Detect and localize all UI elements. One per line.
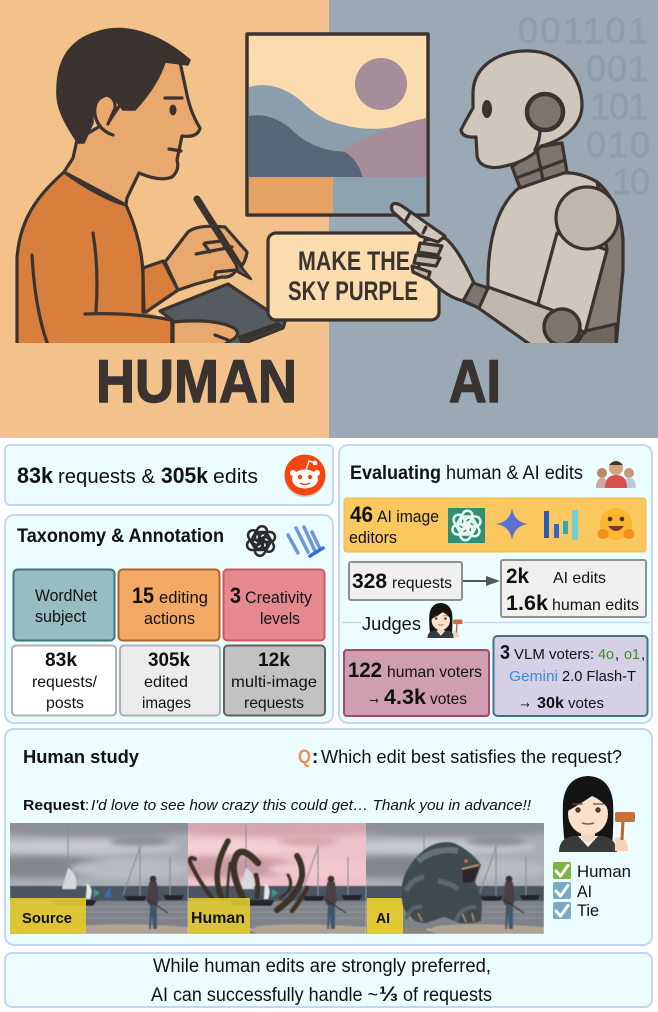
box: AI image editors: AI image [377, 507, 439, 526]
icon: hugging face [598, 508, 634, 540]
photo: source [10, 823, 188, 934]
conclusion text: of requests [403, 985, 492, 1006]
panel: human study [0, 729, 652, 945]
box: AI and human edits: 2k [506, 565, 529, 588]
box: AI image editors [344, 498, 646, 552]
box: multi-image requests count: multi-image [231, 674, 317, 691]
robot figure [392, 51, 623, 348]
arrow: requests to edits [463, 576, 500, 586]
heading: Evaluating [350, 463, 441, 484]
conclusion text: While human edits are strongly preferred, [153, 956, 491, 977]
panel: taxonomy and annotation [5, 515, 333, 723]
photo: source: Source [22, 910, 72, 927]
conclusion text [151, 956, 492, 1006]
box: VLM voters [494, 636, 648, 716]
summary text [17, 463, 258, 488]
icon: reddit [284, 454, 326, 498]
icon: judge [559, 776, 635, 852]
box: editing actions: editing [159, 588, 208, 607]
binary digits background [518, 10, 650, 202]
request text: Request [23, 797, 85, 814]
box: requests count: 83k [45, 650, 77, 671]
panel: conclusion [5, 953, 652, 1007]
box: requests count [12, 646, 116, 716]
heading: Taxonomy & Annotation [17, 526, 224, 547]
box: edited images count: edited [144, 674, 188, 691]
heading: Human study [23, 747, 139, 767]
legend: vote options [553, 862, 631, 920]
box: human voters [344, 650, 489, 716]
summary text: 305k [161, 463, 209, 488]
box: edited images count: 305k [148, 650, 190, 671]
box: VLM voters: votes [568, 695, 604, 712]
box: human voters: → [367, 687, 381, 709]
box: editing actions [118, 570, 220, 640]
heading [350, 463, 583, 484]
box: edited images count: images [142, 695, 191, 712]
photo: AI edit with monster [366, 823, 544, 934]
box: VLM voters: o1 [624, 646, 640, 663]
icon: group of people [596, 461, 636, 488]
question: : [312, 747, 318, 768]
question: Which edit best satisfies the request? [321, 747, 622, 767]
icon: small judge [427, 603, 462, 638]
binary digits background: 001101 [518, 10, 648, 51]
icon: bars logo [544, 510, 578, 540]
binary digits background: 10 [612, 161, 650, 202]
box: AI image editors: 46 [350, 502, 373, 527]
box: VLM voters: , [615, 646, 619, 663]
box: wordnet subject: WordNet [35, 586, 97, 605]
callout: make the sky purple [268, 233, 439, 320]
conclusion text: AI can successfully handle ~ [151, 985, 378, 1006]
photo: human edit with tentacles: Human [191, 910, 245, 927]
box: wordnet subject: subject [35, 607, 86, 626]
photo: human edit with tentacles [187, 823, 366, 934]
painting being edited [247, 34, 428, 215]
callout: make the sky purple: SKY PURPLE [288, 276, 418, 306]
request text: : [85, 797, 89, 814]
heading: human & AI edits [446, 463, 583, 484]
box: editing actions: 15 [132, 583, 154, 608]
summary text: edits [213, 466, 258, 488]
box: wordnet subject [14, 570, 114, 640]
photo: AI edit with monster: AI [376, 910, 390, 927]
binary digits background: 101 [590, 86, 648, 127]
box: human voters: 122 [348, 659, 382, 682]
conclusion text: ⅓ [379, 983, 398, 1006]
option: tie: Tie [577, 901, 599, 920]
box: creativity levels: 3 [230, 583, 241, 608]
box: human voters: votes [430, 691, 467, 708]
callout: make the sky purple: MAKE THE [298, 246, 410, 276]
box: AI image editors: editors [349, 528, 397, 547]
option: AI: AI [577, 882, 592, 901]
box: multi-image requests count: 12k [258, 650, 290, 671]
panel: dataset summary [5, 445, 333, 505]
box: human voters: human voters [387, 664, 482, 681]
box: 328 requests: requests [392, 575, 452, 592]
box: VLM voters: 30k [537, 695, 564, 712]
box: VLM voters: 2.0 Flash-T [562, 668, 636, 685]
box: VLM voters: 4o [598, 646, 614, 663]
box: VLM voters: Gemini [509, 668, 558, 685]
human figure [17, 28, 285, 346]
box: creativity levels [224, 570, 324, 640]
box: multi-image requests count [224, 646, 325, 716]
hero illustration: human versus AI [0, 0, 658, 438]
box: edited images count [120, 646, 220, 716]
box: VLM voters: → [518, 692, 532, 713]
binary digits background: 001 [586, 48, 648, 89]
request text: I'd love to see how crazy this could get… Thank you in advance!! [91, 797, 532, 814]
icon: chatgpt [448, 508, 485, 543]
box: requests count: posts [46, 695, 84, 712]
binary digits background: 010 [586, 124, 650, 165]
panel: evaluating human and AI edits [339, 445, 652, 723]
box: AI and human edits [501, 560, 646, 617]
judges label: Judges [362, 614, 421, 634]
box: AI and human edits: 1.6k [506, 592, 548, 615]
option: human: Human [577, 862, 631, 881]
box: creativity levels: levels [260, 609, 300, 628]
label: AI: AI [449, 348, 501, 415]
box: 328 requests: 328 [352, 570, 387, 593]
label: human: HUMAN [96, 348, 297, 415]
box: human voters: 4.3k [384, 686, 426, 709]
question: Q [298, 747, 311, 768]
box: editing actions: actions [144, 609, 195, 628]
summary text: 83k [17, 463, 54, 488]
box: requests count: requests/ [32, 674, 98, 691]
summary text: requests & [58, 466, 156, 488]
box: multi-image requests count: requests [244, 695, 304, 712]
box: AI and human edits: human edits [552, 597, 639, 614]
icon: gemini sparkle [496, 508, 528, 540]
box: AI and human edits: AI edits [553, 570, 606, 587]
box: VLM voters: 3 [500, 642, 510, 664]
box: creativity levels: Creativity [245, 588, 312, 607]
icon: blue stripes logo [288, 527, 323, 556]
box: 328 requests [349, 562, 462, 600]
box: VLM voters: VLM voters: [514, 646, 594, 663]
icon: openai [246, 524, 276, 558]
box: VLM voters: , [641, 646, 645, 663]
